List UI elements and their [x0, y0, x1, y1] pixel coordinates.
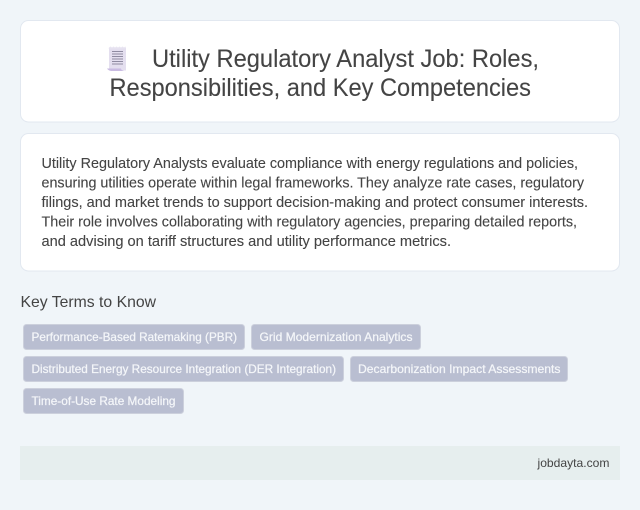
panel: description card — [20, 134, 620, 271]
panel: title card — [20, 20, 620, 122]
chip: DER integration: Distributed Energy Resource Integration (DER Integration) — [32, 362, 336, 376]
title — [110, 45, 539, 102]
title: Utility Regulatory Analyst Job: Roles, — [152, 45, 539, 73]
chip: PBR: Performance-Based Ratemaking (PBR) — [32, 330, 237, 344]
chip: time-of-use: Time-of-Use Rate Modeling — [32, 394, 176, 408]
chip: decarbonization: Decarbonization Impact Assessments — [358, 362, 560, 376]
footer bar — [20, 446, 620, 480]
description text: Their role involves collaborating with regulatory agencies, preparing detailed reports, — [42, 214, 577, 230]
chip: time-of-use — [24, 388, 184, 414]
chip: PBR — [24, 324, 244, 350]
footer text: jobdayta.com — [536, 456, 610, 470]
chip: decarbonization — [350, 356, 568, 382]
description text — [42, 156, 588, 250]
title: Responsibilities, and Key Competencies — [110, 74, 531, 102]
chip: grid modernization — [252, 324, 420, 350]
description text: filings, and market trends to support decision-making and protect consumer interests. — [42, 195, 588, 211]
description text: Utility Regulatory Analysts evaluate compliance with energy regulations and policies, — [42, 156, 578, 172]
description text: and advising on tariff structures and utility performance metrics. — [42, 234, 451, 250]
description text: ensuring utilities operate within legal frameworks. They analyze rate cases, regulatory — [42, 176, 585, 192]
panel: key term chips — [24, 324, 568, 414]
heading: key terms: Key Terms to Know — [20, 294, 156, 311]
chip: grid modernization: Grid Modernization Analytics — [260, 330, 412, 344]
chip: DER integration — [24, 356, 344, 382]
icon: receipt — [107, 46, 126, 71]
